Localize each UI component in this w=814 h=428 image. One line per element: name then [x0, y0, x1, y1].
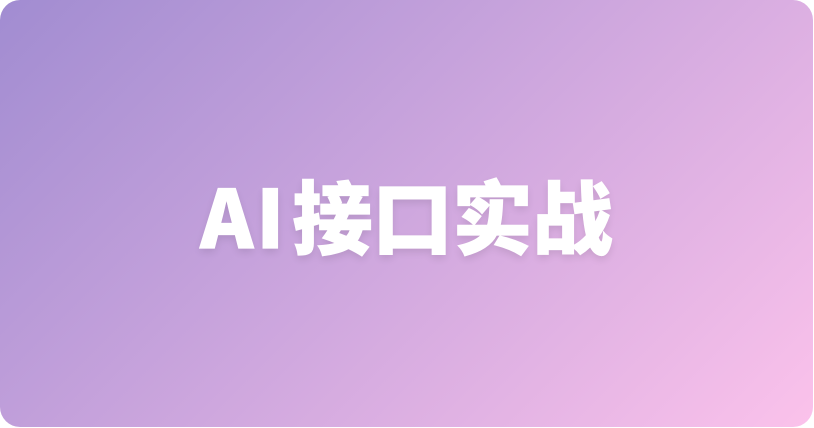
- title: AI 接口实战: [200, 156, 613, 272]
